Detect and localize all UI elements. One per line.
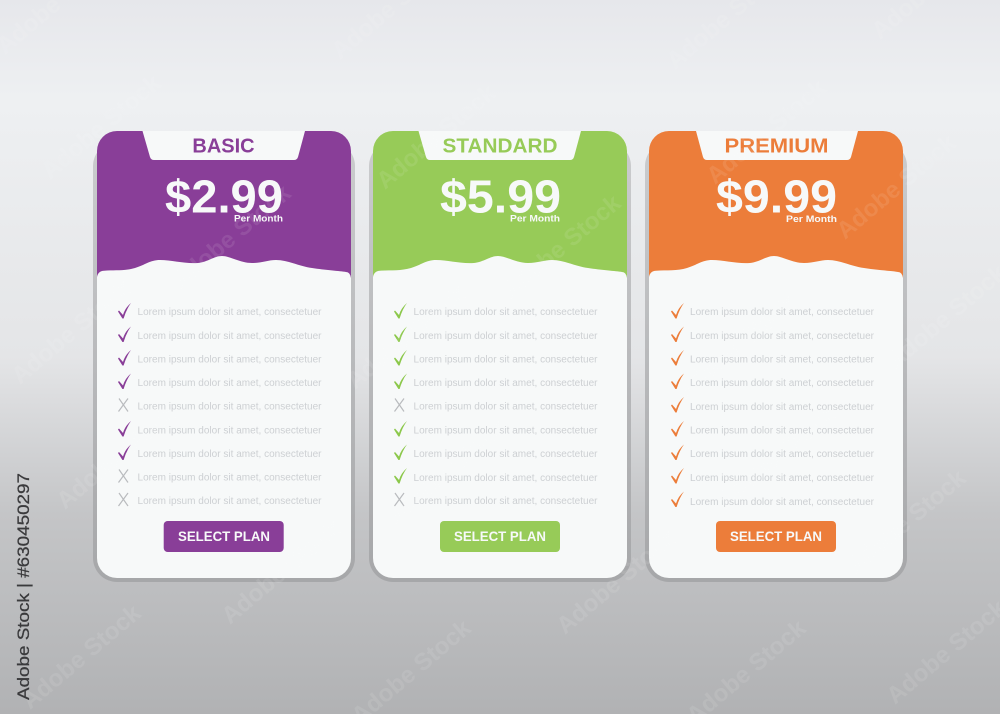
feature 8 (671, 468, 875, 484)
watermark pattern: Adobe Stock (552, 524, 682, 640)
button: premium: SELECT PLAN (730, 528, 822, 544)
feature 5 (671, 397, 875, 413)
price: standard: $5.99 (440, 171, 561, 223)
watermark pattern: Adobe Stock (382, 414, 512, 530)
feature 2: Lorem ipsum dolor sit amet, consectetuer (414, 331, 598, 342)
card body: basic (97, 131, 351, 578)
feature 2 (394, 326, 598, 342)
header: basic (97, 131, 351, 278)
price: basic: $2.99 (165, 171, 283, 223)
header: standard (373, 131, 627, 278)
card shadow: premium (645, 142, 907, 582)
feature 1: Lorem ipsum dolor sit amet, consectetuer (690, 307, 875, 318)
header: premium (649, 131, 903, 278)
price period: standard: Per Month (510, 214, 560, 225)
watermark pattern: Adobe Stock (842, 464, 972, 580)
feature 7: Lorem ipsum dolor sit amet, consectetuer (138, 449, 322, 460)
feature 8 (394, 468, 598, 484)
feature 3: Lorem ipsum dolor sit amet, consectetuer (690, 354, 875, 366)
feature 1 (671, 303, 875, 318)
feature 6 (671, 421, 875, 436)
feature 4: Lorem ipsum dolor sit amet, consectetuer (138, 378, 322, 389)
feature 2 (118, 326, 322, 342)
feature 9: Lorem ipsum dolor sit amet, consectetuer (690, 497, 875, 508)
watermark pattern: Adobe Stock (7, 274, 137, 390)
feature 5 (unavailable): Lorem ipsum dolor sit amet, consectetuer (414, 402, 598, 412)
feature 1: Lorem ipsum dolor sit amet, consectetuer (414, 307, 598, 318)
card body: standard (373, 131, 627, 578)
feature 8: Lorem ipsum dolor sit amet, consectetuer (414, 473, 598, 484)
watermark pattern: Adobe Stock (167, 179, 297, 295)
price period: basic: Per Month (234, 214, 283, 225)
feature 6 (394, 421, 598, 436)
watermark pattern: Adobe Stock (52, 399, 182, 515)
feature 1 (394, 303, 598, 318)
feature 8 (unavailable): Lorem ipsum dolor sit amet, consectetuer (138, 472, 322, 484)
card shadow: standard (369, 142, 631, 582)
tab: premium (696, 131, 858, 160)
feature 6: Lorem ipsum dolor sit amet, consectetuer (414, 426, 598, 436)
watermark pattern: Adobe Stock (372, 79, 502, 195)
price: premium: $9.99 (716, 171, 837, 223)
feature 6: Lorem ipsum dolor sit amet, consectetuer (138, 426, 322, 436)
feature list: basic (118, 303, 322, 507)
feature 7: Lorem ipsum dolor sit amet, consectetuer (690, 449, 875, 460)
button: premium (716, 521, 836, 552)
card body: premium (649, 131, 903, 578)
feature 3 (671, 350, 875, 366)
feature 4: Lorem ipsum dolor sit amet, consectetuer (414, 378, 598, 389)
button: standard: SELECT PLAN (454, 528, 546, 544)
feature 3 (394, 350, 598, 366)
feature 1: Lorem ipsum dolor sit amet, consectetuer (138, 307, 322, 318)
panel: standard plan (369, 131, 631, 582)
feature 9 (unavailable): Lorem ipsum dolor sit amet, consectetuer (138, 496, 322, 507)
watermark pattern: Adobe Stock (342, 279, 472, 395)
feature 2 (671, 326, 875, 342)
button: standard (440, 521, 560, 552)
panel: basic plan (93, 131, 355, 582)
feature 7 (671, 444, 875, 460)
heading: basic: BASIC (192, 136, 255, 158)
watermark pattern: Adobe Stock (702, 74, 832, 190)
heading: standard: STANDARD (442, 136, 558, 158)
tab: basic (142, 131, 305, 160)
feature 6: Lorem ipsum dolor sit amet, consectetuer (690, 426, 875, 436)
panel: premium plan (645, 131, 907, 582)
button: basic: SELECT PLAN (178, 528, 270, 544)
watermark pattern: Adobe Stock (712, 399, 842, 515)
feature 2: Lorem ipsum dolor sit amet, consectetuer (138, 331, 322, 342)
feature 7 (394, 444, 598, 460)
feature 9 (671, 492, 875, 508)
tab: standard (418, 131, 581, 160)
feature 3: Lorem ipsum dolor sit amet, consectetuer (138, 354, 322, 366)
feature 4 (671, 374, 875, 389)
feature 9 (unavailable): Lorem ipsum dolor sit amet, consectetuer (414, 496, 598, 507)
feature 7: Lorem ipsum dolor sit amet, consectetuer (414, 449, 598, 460)
watermark pattern: Adobe Stock (832, 129, 962, 245)
feature 4 (394, 374, 598, 389)
watermark pattern: Adobe Stock (17, 599, 147, 714)
price period: premium: Per Month (786, 214, 837, 225)
feature 3: Lorem ipsum dolor sit amet, consectetuer (414, 354, 598, 366)
watermark pattern: Adobe Stock (37, 69, 167, 185)
watermark pattern: Adobe Stock (672, 289, 802, 405)
card shadow: basic (93, 142, 355, 582)
feature 1 (118, 303, 322, 318)
feature 5: Lorem ipsum dolor sit amet, consectetuer (690, 402, 875, 413)
watermark pattern: Adobe Stock (217, 514, 347, 630)
feature 3 (118, 350, 322, 366)
feature 4: Lorem ipsum dolor sit amet, consectetuer (690, 378, 875, 389)
button: basic (164, 521, 284, 552)
feature 2: Lorem ipsum dolor sit amet, consectetuer (690, 331, 875, 342)
feature 6 (118, 421, 322, 436)
feature 8: Lorem ipsum dolor sit amet, consectetuer (690, 473, 875, 484)
feature list: premium (671, 303, 875, 508)
feature 7 (118, 444, 322, 460)
feature 4 (118, 374, 322, 389)
stock id label: Adobe Stock | #630450297 (14, 473, 33, 700)
watermark pattern: Adobe Stock (497, 189, 627, 305)
feature list: standard (394, 303, 598, 507)
heading: premium: PREMIUM (724, 136, 828, 158)
feature 5 (unavailable): Lorem ipsum dolor sit amet, consectetuer (138, 402, 322, 412)
